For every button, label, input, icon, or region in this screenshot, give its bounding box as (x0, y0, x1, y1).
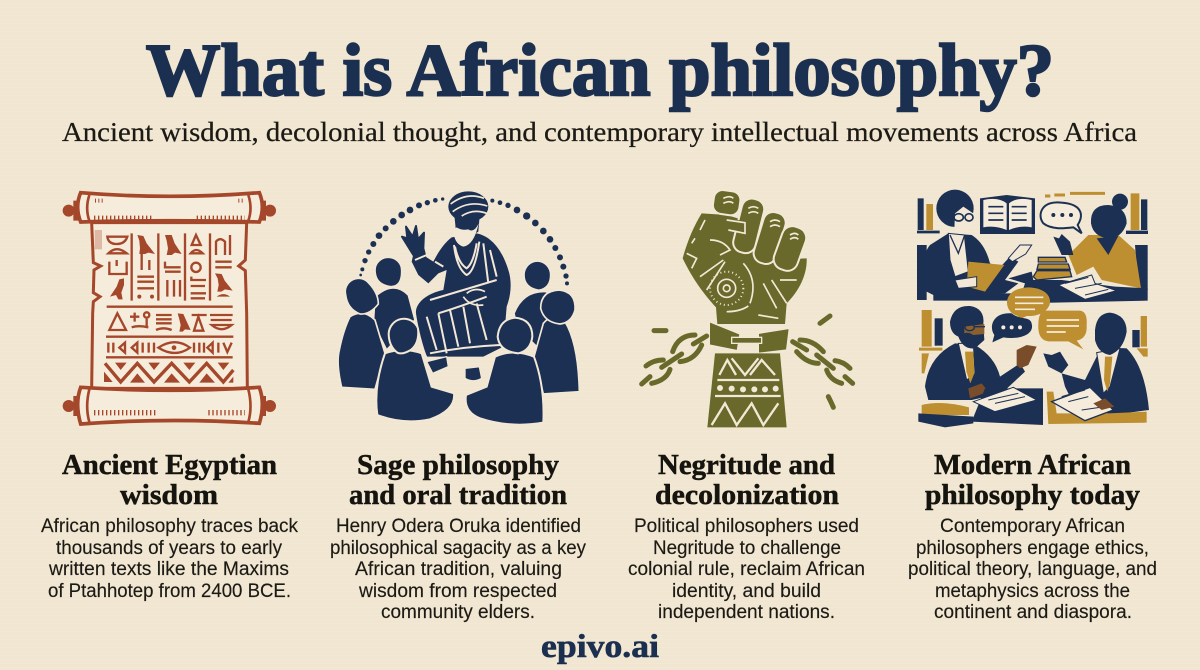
title: What is African philosophy? (146, 30, 1054, 112)
bottom roller (63, 387, 276, 424)
zigzag band (104, 363, 233, 383)
top-left scholar with book (917, 190, 1032, 301)
heading: decolonization: decolonization (655, 479, 839, 511)
brand footer: epivo.ai (541, 629, 659, 665)
heading: Sage philosophy: Sage philosophy (357, 449, 559, 481)
body lines (908, 516, 1157, 623)
hieroglyph birds (95, 230, 233, 350)
top roller (63, 193, 276, 222)
back children (373, 257, 557, 350)
body lines: written texts like the Maxims (48, 559, 289, 580)
body lines: Political philosophers used (634, 516, 859, 537)
open book (980, 195, 1035, 234)
icon: papyrus scroll with hieroglyphs (63, 193, 276, 424)
column 3 text (628, 449, 865, 623)
body lines: thousands of years to early (56, 538, 282, 559)
front children (376, 318, 544, 425)
top-right scholar (1053, 193, 1148, 290)
thumb (695, 213, 748, 240)
broken cuff (709, 322, 789, 353)
body lines: continent and diaspora. (934, 602, 1132, 623)
fist palm (683, 213, 807, 324)
scroll sheet (92, 223, 247, 388)
body lines: political theory, language, and (908, 559, 1157, 580)
body lines: colonial rule, reclaim African (628, 559, 865, 580)
heading: and oral tradition: and oral tradition (349, 479, 567, 511)
column 2 text (330, 449, 586, 623)
body lines: African tradition, valuing (355, 559, 562, 580)
body lines (628, 516, 865, 623)
body lines: independent nations. (658, 602, 835, 623)
body lines: community elders. (381, 602, 535, 623)
side children (338, 278, 579, 394)
sage head with turban (448, 191, 488, 247)
heading: Ancient Egyptian: Ancient Egyptian (62, 449, 277, 481)
body lines: Henry Odera Oruka identified (336, 516, 581, 537)
gold speech bubbles (992, 287, 1087, 349)
speech bubble dots (1041, 193, 1105, 233)
bottom-right scholar (1043, 313, 1149, 424)
body lines (330, 516, 586, 623)
forearm with pattern (707, 353, 787, 427)
bottom-left books and table (918, 387, 1043, 427)
body lines: metaphysics across the (935, 581, 1130, 602)
heading: wisdom: wisdom (120, 479, 218, 511)
arc of dots (359, 197, 569, 285)
subtitle: Ancient wisdom, decolonial thought, and contemporary intellectual movements across Africa (62, 117, 1137, 147)
icon: sage teaching seated children (338, 191, 579, 425)
body lines (41, 516, 298, 602)
column 4 text (908, 449, 1157, 623)
body lines: identity, and build (672, 581, 821, 602)
fist tribal markings (687, 197, 798, 318)
fingers (712, 189, 809, 274)
body lines: of Ptahhotep from 2400 BCE. (48, 581, 291, 602)
broken chains (642, 316, 853, 407)
icon: raised fist breaking chains (642, 189, 853, 427)
bottom-left scholar (919, 306, 1037, 400)
heading: Modern African: Modern African (934, 449, 1131, 481)
body lines: wisdom from respected (358, 581, 557, 602)
hieroglyph columns (106, 233, 233, 357)
desk with stacked books (1008, 257, 1148, 303)
heading: philosophy today: philosophy today (925, 479, 1141, 511)
body lines: philosophical sagacity as a key (330, 538, 586, 559)
icon: modern African philosophers in discussion (917, 190, 1149, 427)
body lines: Contemporary African (940, 516, 1125, 537)
column 1 text (41, 449, 298, 602)
body lines: Negritude to challenge (653, 538, 841, 559)
sage body and robe (402, 226, 511, 381)
body lines: African philosophy traces back (41, 516, 298, 537)
body lines: philosophers engage ethics, (916, 538, 1149, 559)
heading: Negritude and: Negritude and (658, 449, 835, 481)
